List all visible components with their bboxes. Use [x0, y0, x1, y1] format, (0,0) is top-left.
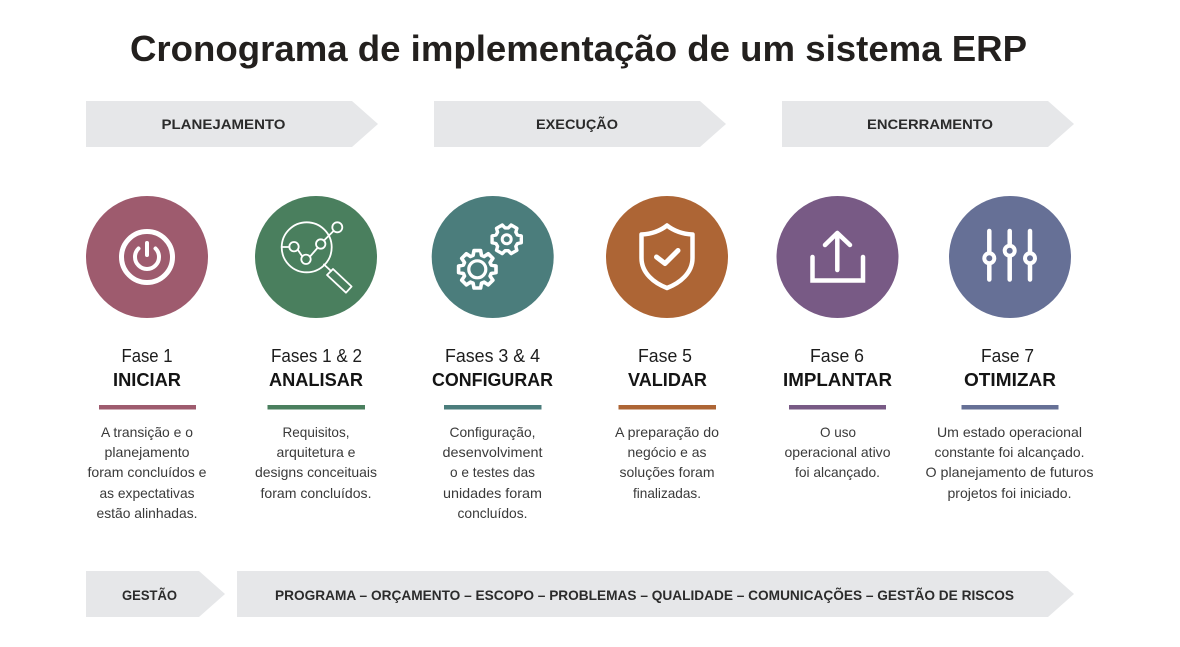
phase label: Fases 3 & 4 [445, 346, 540, 366]
description: foram concluídos e [88, 464, 207, 480]
description: O uso [820, 424, 856, 440]
panel: fase 7 otimizar [926, 196, 1094, 501]
description: Um estado operacional [937, 424, 1082, 440]
phase label: Fase 6 [810, 346, 864, 366]
description: estão alinhadas. [96, 505, 198, 521]
icon: gears [432, 196, 554, 318]
arrow: áreas de gestão: PROGRAMA – ORÇAMENTO – ESCOPO – PROBLEMAS – QUALIDADE – COMUNICAÇÕES – GESTÃO DE RISCOS [275, 586, 1014, 603]
panel: fase 5 validar [606, 196, 728, 501]
phase label: Fase 7 [981, 346, 1034, 366]
description [784, 424, 891, 480]
panel: fases 3 e 4 configurar [432, 196, 554, 521]
description: soluções foram [620, 464, 714, 480]
phase name: VALIDAR [628, 370, 707, 390]
description [255, 424, 377, 501]
description: foi alcançado. [795, 464, 880, 480]
description: operacional ativo [784, 444, 891, 460]
description [615, 424, 719, 501]
description: A transição e o [101, 424, 193, 440]
description: finalizadas. [633, 485, 701, 501]
phase label: Fase 1 [122, 346, 172, 366]
panel: fase 1 iniciar [86, 196, 208, 521]
phase name: OTIMIZAR [964, 370, 1056, 390]
description: designs conceituais [255, 464, 377, 480]
description: constante foi alcançado. [934, 444, 1084, 460]
description: desenvolviment [442, 444, 543, 460]
panel: fase 6 implantar [776, 196, 898, 480]
arrow: planejamento [86, 101, 378, 147]
description: A preparação do [615, 424, 719, 440]
description: as expectativas [100, 485, 194, 501]
title: Cronograma de implementação de um sistema ERP [130, 28, 1027, 69]
description: projetos foi iniciado. [948, 485, 1072, 501]
icon: magnifier with chart [255, 196, 377, 318]
arrow: gestão [86, 571, 225, 617]
description: concluídos. [458, 505, 528, 521]
description: foram concluídos. [260, 485, 372, 501]
description [88, 424, 207, 521]
panel: fases 1 e 2 analisar [255, 196, 377, 501]
arrow: áreas de gestão [237, 571, 1074, 617]
description [926, 424, 1094, 501]
arrow: execução: EXECUÇÃO [536, 115, 618, 132]
description: o e testes das [450, 464, 535, 480]
phase name: CONFIGURAR [432, 370, 553, 390]
phase name: INICIAR [113, 370, 181, 390]
description: arquitetura e [276, 444, 356, 460]
icon: shield with check [606, 196, 728, 318]
description: planejamento [104, 444, 190, 460]
description [442, 424, 543, 521]
icon: power [86, 196, 208, 318]
arrow: encerramento [782, 101, 1074, 147]
icon: upload [776, 196, 898, 318]
arrow: execução [434, 101, 726, 147]
phase name: ANALISAR [269, 370, 363, 390]
description: unidades foram [443, 485, 542, 501]
arrow: planejamento: PLANEJAMENTO [162, 116, 286, 132]
description: negócio e as [628, 444, 706, 460]
description: Configuração, [450, 424, 536, 440]
description: Requisitos, [282, 424, 350, 440]
phase label: Fase 5 [638, 346, 692, 366]
icon: sliders [949, 196, 1071, 318]
description: O planejamento de futuros [926, 464, 1094, 480]
arrow: encerramento: ENCERRAMENTO [867, 116, 993, 132]
phase label: Fases 1 & 2 [271, 346, 362, 366]
phase name: IMPLANTAR [783, 370, 892, 390]
arrow: gestão: GESTÃO [122, 586, 177, 603]
